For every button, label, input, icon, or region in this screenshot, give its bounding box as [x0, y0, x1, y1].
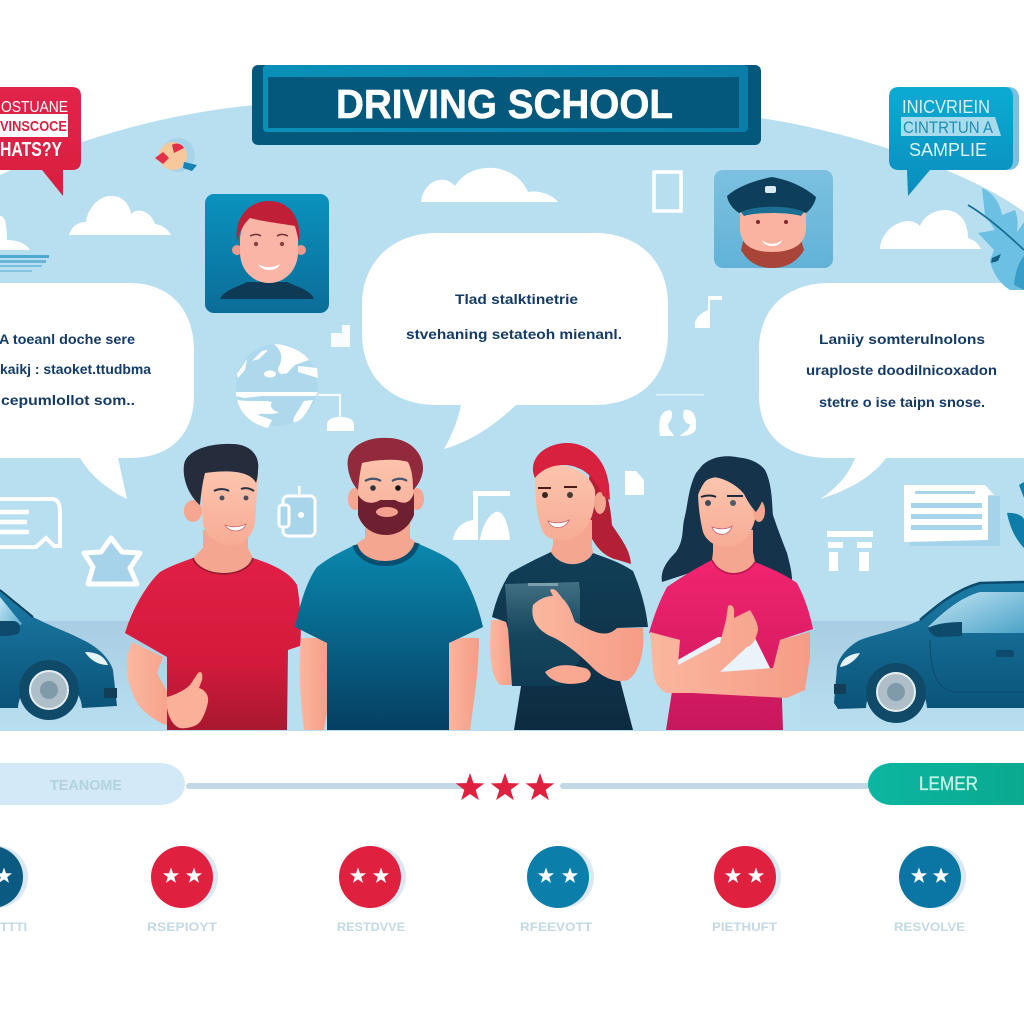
- head: [696, 456, 765, 547]
- red speech bubble: HATS?Y: [0, 139, 63, 161]
- red shirt: [125, 558, 301, 730]
- person: bearded man in teal shirt: [295, 438, 483, 730]
- badge 3 label: RESTDVVE: [337, 920, 405, 934]
- red speech bubble: VINSCOCE: [0, 118, 67, 135]
- left bubble text: kaikj : staoket.ttudbma: [0, 361, 151, 377]
- icon: small document: [331, 325, 350, 347]
- badge 2 label: RSEPIOYT: [147, 920, 218, 934]
- icon: ball: [155, 138, 197, 172]
- speech bubble: center: [362, 233, 668, 449]
- right pill label: LEMER: [919, 774, 978, 795]
- left bubble text: cepumlollot som..: [1, 392, 135, 408]
- arms: [300, 638, 329, 730]
- right bubble text: Laniiy somterulnolons: [819, 331, 985, 347]
- title text: DRIVING SCHOOL: [336, 81, 673, 127]
- blue speech bubble: SAMPLIE: [909, 140, 987, 160]
- icon: small paper: [625, 471, 644, 495]
- head: [184, 444, 258, 545]
- left bubble text: A toeanl doche sere: [0, 331, 135, 347]
- title banner: [252, 65, 761, 145]
- crossed arm and hand: [532, 589, 643, 681]
- hair tail: [585, 470, 631, 564]
- person: woman in pink shirt with paper: [649, 456, 813, 730]
- pink shirt: [649, 560, 813, 730]
- leaves: top right: [968, 188, 1024, 290]
- center bubble text: stvehaning setateoh mienanl.: [406, 326, 622, 342]
- arms: [490, 620, 515, 685]
- white rectangle outline icon: [654, 172, 681, 211]
- left wheel hub: [30, 671, 68, 709]
- icon: building outline: [453, 491, 510, 540]
- right wheel hub: [877, 673, 915, 711]
- blue speech bubble: [889, 87, 1019, 196]
- avatar: officer with cap: [714, 170, 833, 268]
- water lines: [0, 255, 49, 272]
- right bubble text: [806, 331, 997, 410]
- clouds: [0, 168, 981, 250]
- rating badge 6: [894, 846, 966, 934]
- badge 4 label: RFEEVOTT: [520, 920, 593, 934]
- car: left: [0, 590, 117, 720]
- center bubble text: Tlad stalktinetrie: [455, 291, 578, 307]
- thumbs-up hand: [167, 672, 208, 728]
- leaf: lower right: [1007, 482, 1024, 548]
- red bubble text: OSTUANE: [1, 99, 68, 116]
- icon: note sheet: [904, 485, 1000, 546]
- person: woman in black shirt with clipboard: [490, 443, 648, 730]
- head: [348, 438, 424, 535]
- clipboard: [505, 582, 580, 686]
- right pill: [868, 763, 1024, 805]
- right bubble text: stetre o ise taipn snose.: [819, 394, 985, 410]
- white paper: [676, 637, 771, 672]
- rating badge 4: [520, 846, 594, 934]
- icon: globe connector with pin: [318, 395, 354, 431]
- road band: left: [0, 621, 190, 731]
- icon: headset: [656, 394, 704, 436]
- person: man in red shirt: [125, 444, 301, 730]
- left arm: [127, 642, 180, 728]
- teal shirt: [295, 543, 483, 730]
- badge 6 label: RESVOLVE: [894, 920, 965, 934]
- neck: [193, 530, 253, 574]
- left pill label: TEANOME: [50, 777, 122, 794]
- blue dome backdrop: [0, 105, 1024, 731]
- arms and hand: [650, 605, 810, 698]
- blue speech bubble: CINTRTUN A: [903, 118, 994, 137]
- neck: [712, 530, 755, 574]
- badge 5 label: PIETHUFT: [712, 920, 778, 934]
- blue bubble text: INICVRIEIN: [902, 97, 990, 117]
- left bubble text: [0, 331, 151, 408]
- icon: music note: [695, 296, 722, 328]
- rating badge 2: [147, 846, 218, 934]
- rating badge 3: [337, 846, 406, 934]
- badge 1 label: TTTI: [0, 920, 27, 934]
- head: [533, 443, 610, 540]
- right bubble text: uraploste doodilnicoxadon: [806, 362, 997, 378]
- rating badge 1: [0, 846, 28, 934]
- speech bubble: left: [0, 283, 194, 499]
- icon: star badge: [84, 538, 140, 584]
- left pill: [0, 763, 185, 805]
- neck: [551, 520, 593, 564]
- avatar: red-haired instructor: [205, 194, 329, 313]
- icon: gate: [827, 531, 873, 571]
- icon: walkie talkie: [279, 486, 315, 536]
- rating badge 5: [712, 846, 781, 934]
- long dark hair: [662, 457, 792, 582]
- road band: right: [800, 621, 1024, 731]
- speech bubble: right: [759, 283, 1024, 499]
- neck: [355, 515, 417, 562]
- icon: globe: [236, 344, 318, 428]
- red speech bubble: [0, 87, 81, 196]
- three red stars: [456, 773, 554, 800]
- center bubble text: [406, 291, 622, 342]
- black shirt: [492, 552, 648, 730]
- icon: chat box: [0, 499, 60, 547]
- progress line: [186, 783, 870, 789]
- car: right: [834, 582, 1024, 723]
